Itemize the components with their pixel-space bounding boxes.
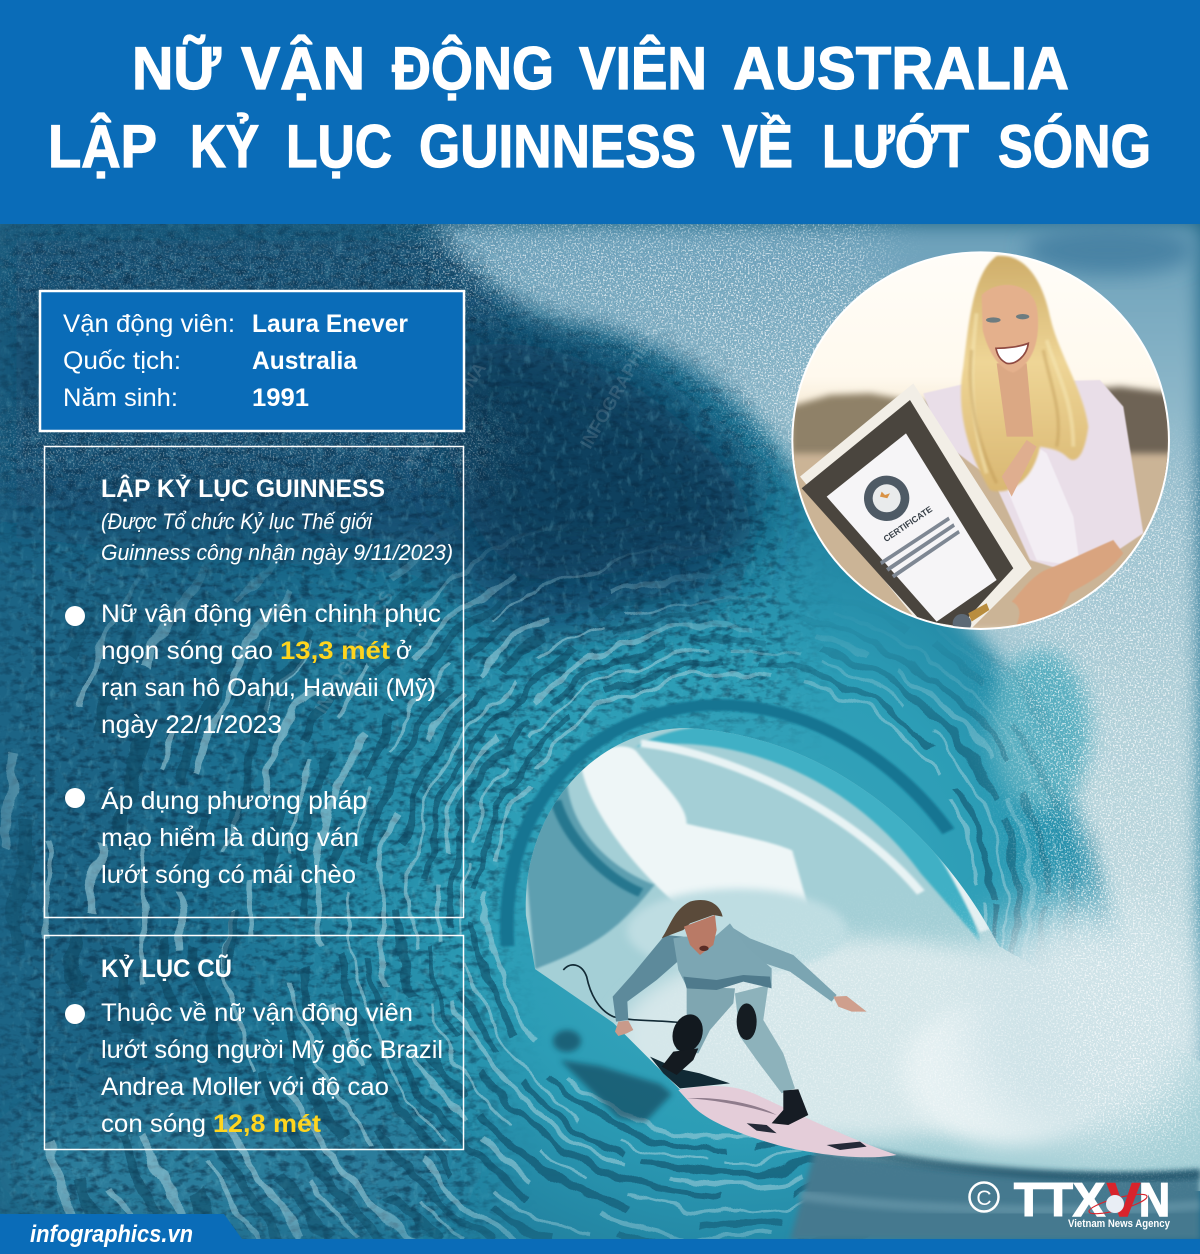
title: SÓNG [998, 113, 1151, 180]
watermarks: TTXVN — VNA [402, 358, 490, 472]
title: NỮ [132, 35, 221, 102]
wake shadow behind board [650, 1057, 730, 1088]
watermarks: INFOGRAPHICS [272, 296, 373, 417]
bullet: wave height [65, 600, 441, 739]
barrel interior [480, 705, 1200, 1214]
torso [673, 923, 772, 988]
profile values: Laura Enever [252, 310, 408, 338]
sweater [923, 380, 1143, 573]
title: LƯỚT [822, 113, 969, 180]
agency wordmark: TTX [1014, 1173, 1105, 1226]
guinness seal [864, 476, 909, 521]
panel: athlete profile [40, 291, 464, 431]
bullet: wave height: rạn san hô Oahu, Hawaii (Mỹ) [101, 674, 436, 702]
rear leg [735, 985, 795, 1093]
bullet: previous holder: Andrea Moller với độ cao [101, 1073, 389, 1101]
face [684, 915, 717, 955]
arm right [727, 925, 837, 1002]
arm left [613, 935, 683, 1022]
bullet: previous holder: Thuộc về nữ vận động viên [101, 999, 413, 1027]
bullet: previous holder: 12,8 mét [213, 1110, 322, 1138]
bullet: wave height: ngày 22/1/2023 [101, 711, 282, 739]
header band [0, 0, 1200, 224]
dunes [790, 393, 967, 473]
panel heading: LẬP KỶ LỤC GUINNESS [101, 473, 385, 503]
title: ĐỘNG [392, 35, 554, 102]
panel heading: KỶ LỤC CŨ [101, 953, 232, 983]
title: VẬN [241, 35, 365, 102]
bullet: method: Áp dụng phương pháp [101, 786, 367, 815]
recognition note: (Được Tổ chức Kỷ lục Thế giới [101, 509, 373, 534]
bullet: previous holder: lướt sóng người Mỹ gốc Brazil [101, 1036, 443, 1064]
profile values [252, 310, 408, 412]
title: KỶ [190, 113, 259, 180]
profile values: Australia [252, 347, 358, 375]
copyright symbol [970, 1182, 998, 1212]
bullet: wave height: 13,3 mét [280, 637, 391, 665]
profile labels: Năm sinh: [63, 384, 178, 412]
bullet: wave height: Nữ vận động viên chinh phục [101, 600, 441, 628]
face and neck [997, 363, 1033, 437]
watermarks: INFOGRAPHICS [576, 322, 662, 452]
panel: previous record [44, 936, 464, 1150]
logo: TTXVN Vietnam News Agency: V [1107, 1173, 1141, 1226]
bullet: wave height: ở [396, 637, 412, 665]
leash [563, 965, 680, 1023]
title [48, 35, 1151, 180]
lower right water [790, 1150, 1200, 1240]
bullet: method: lướt sóng có mái chèo [101, 861, 356, 889]
front leg [673, 987, 735, 1053]
recognition note: Guinness công nhận ngày 9/11/2023) [101, 540, 453, 565]
certificate frame [800, 383, 1032, 633]
hair [662, 900, 723, 938]
seal and sticker [952, 614, 972, 628]
title: LỤC [286, 113, 392, 180]
bullet: method: mạo hiểm là dùng ván [101, 824, 359, 852]
surfer on pink board [563, 900, 897, 1157]
bullet: wave height: ngọn sóng cao [101, 637, 273, 665]
dark shadow patches on the wall [553, 1030, 672, 1122]
globe [1087, 1190, 1149, 1218]
profile values: 1991 [252, 384, 309, 412]
logo: TTXVN Vietnam News Agency [970, 1173, 1171, 1230]
hair [961, 256, 1088, 491]
title: VIÊN [579, 35, 707, 102]
forearm and hand [1012, 540, 1123, 630]
title: VỀ [722, 113, 793, 180]
watermarks: INFOGRAPHICS [311, 587, 397, 717]
title: GUINNESS [419, 113, 696, 180]
title: AUSTRALIA [733, 35, 1069, 102]
profile labels: Quốc tịch: [63, 347, 181, 375]
recognition note [101, 509, 453, 565]
boot right [772, 1089, 808, 1125]
logo: TTXVN Vietnam News Agency: N [1139, 1173, 1170, 1226]
certificate heading: CERTIFICATE [882, 504, 934, 544]
profile labels: Vận động viên: [63, 310, 235, 338]
panel: Guinness record [44, 446, 464, 918]
copyright symbol: C [976, 1187, 992, 1210]
chest [1002, 440, 1037, 497]
profile labels [63, 310, 235, 412]
surfboard [678, 1086, 897, 1157]
footer band [0, 1214, 1200, 1254]
watermarks [272, 296, 662, 717]
bullet: method [65, 786, 367, 889]
website: infographics.vn [30, 1221, 193, 1248]
tagline: Vietnam News Agency [1068, 1218, 1171, 1230]
bullet: previous holder [65, 999, 443, 1138]
wave wall streaks [0, 532, 1088, 1239]
portrait photo: Laura Enever with Guinness certificate [787, 250, 1177, 633]
title: LẬP [48, 113, 157, 180]
bullet: previous holder: con sóng [101, 1110, 206, 1138]
foam spreading to the right [965, 900, 1200, 1140]
